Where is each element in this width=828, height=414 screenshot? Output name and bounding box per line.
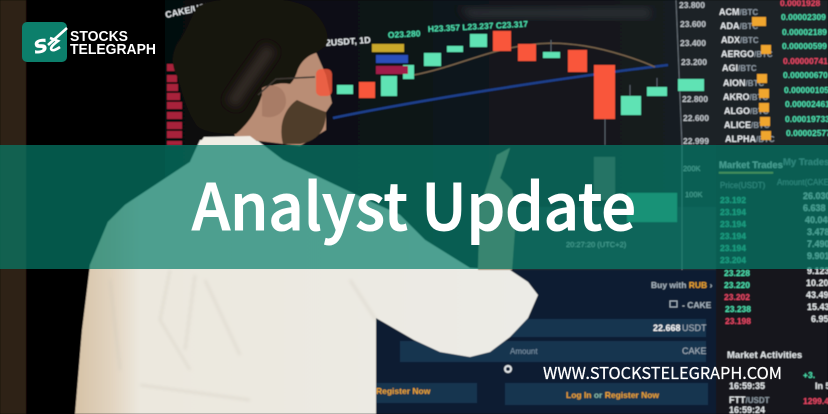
market price list: 0.00002189 <box>782 27 827 37</box>
market trades table: Price(USDT) <box>720 181 766 190</box>
market trades table: 23.194 <box>720 207 746 217</box>
shirt folds <box>110 270 376 400</box>
market trades table: 23.228 <box>724 268 750 278</box>
market price list: 0.00000599 <box>782 41 827 51</box>
market price list: 0.00000670 <box>783 70 828 80</box>
buy form text: Log In or Register Now <box>566 390 659 400</box>
logo <box>22 22 156 62</box>
screen glare <box>460 8 650 18</box>
market pair list: ALPHA/BTC <box>725 134 775 144</box>
chart lower details <box>566 157 703 249</box>
hair <box>173 0 328 134</box>
price axis labels <box>679 0 709 146</box>
price axis labels: 22.999 <box>683 136 709 146</box>
logo badge <box>22 22 67 62</box>
market pair list: ADX/BTC <box>721 35 759 45</box>
market price list: 0.00000105 <box>784 85 828 95</box>
wall strip <box>0 0 26 414</box>
logo wordmark <box>70 29 156 58</box>
market pair list: AERGO/BTC <box>721 49 773 59</box>
white collar <box>198 136 262 145</box>
title: Analyst Update <box>192 157 636 249</box>
candlestick chart <box>337 31 704 145</box>
form input rows <box>375 319 708 405</box>
beard <box>281 100 326 144</box>
market price list: 0.00000741 <box>783 56 828 66</box>
ear <box>262 85 286 117</box>
logo monogram: s <box>30 30 50 60</box>
price axis labels: 23.800 <box>679 0 705 10</box>
buy form text: CAKE <box>682 346 707 356</box>
buy and sell form panel <box>330 270 716 414</box>
market activities: +3. <box>803 370 815 380</box>
chart header text: H23.357 L23.237 C23.317 <box>428 19 528 34</box>
market trades table: 23.192 <box>720 195 746 205</box>
hand pointing at screen <box>478 148 516 270</box>
neck and face <box>232 48 332 146</box>
logo wordmark: STOCKS <box>70 29 128 45</box>
market pair list: AGI/BTC <box>722 63 757 73</box>
glasses <box>258 69 332 96</box>
chart header text: 2USDT, 1D <box>325 35 372 48</box>
market trades table: 23.194 <box>720 231 746 241</box>
green title band <box>0 145 828 269</box>
buy form text: - CAKE <box>682 300 712 310</box>
shirt <box>75 140 538 414</box>
market pair list: ADA/BTC <box>720 21 758 31</box>
buy form text: USDT <box>682 323 707 333</box>
market trades table: 23.220 <box>724 280 750 290</box>
lower chart panel <box>511 207 716 270</box>
analyst figure <box>75 0 538 414</box>
price axis labels: 23.600 <box>680 19 706 29</box>
buy form text: Amount <box>510 347 538 356</box>
price axis labels: 22.600 <box>683 113 709 123</box>
chart header text: O23.280 <box>388 28 421 40</box>
axis line <box>676 0 682 270</box>
market price list <box>780 0 828 138</box>
buy form text: Buy with RUB › <box>651 280 713 290</box>
market activities: 16:59:35 <box>729 381 765 391</box>
price axis labels: 22.800 <box>682 94 708 104</box>
market trades table: Market Trades <box>719 160 783 171</box>
market trades table: 23.202 <box>724 292 750 302</box>
moving average lines <box>333 43 668 118</box>
buy form text: 22.668 <box>653 323 681 333</box>
order book column bottom <box>716 145 828 414</box>
market pair list: AKRO/BTC <box>723 92 768 102</box>
buy form text <box>376 280 713 400</box>
market pair list: AION/BTC <box>723 78 764 88</box>
market trades table: 23.238 <box>725 304 751 314</box>
market pair list: ALICE/BTC <box>724 120 770 130</box>
market pair list <box>719 7 775 144</box>
chart header text <box>164 0 528 74</box>
chart lower details: 20:27:20 (UTC+2) <box>566 240 627 249</box>
market pair list: ALGO/BTC <box>724 106 769 116</box>
market activities <box>727 350 828 414</box>
market activities: Market Activities <box>727 350 802 361</box>
logo wordmark: TELEGRAPH <box>70 42 156 58</box>
market trades table: 23.194 <box>720 219 746 229</box>
order book column top <box>680 0 828 145</box>
market activities: FTT/USDT <box>729 395 770 405</box>
price axis labels: 23.200 <box>681 57 707 67</box>
market trades table: 23.198 <box>725 316 751 326</box>
buy form text: Register Now <box>376 386 431 396</box>
market trades table: 23.194 <box>720 243 746 253</box>
red price ladder <box>167 64 182 145</box>
market trades table: 6.638 <box>803 203 826 213</box>
price axis labels: 23.400 <box>680 38 706 48</box>
market pair list: ACM/BTC <box>719 7 758 17</box>
chart lower details: 100K <box>685 190 703 199</box>
hair highlight <box>232 48 270 104</box>
website url: WWW.STOCKSTELEGRAPH.COM <box>543 360 782 384</box>
chart lower details: 200K <box>683 164 701 173</box>
market trades table: 23.204 <box>720 255 746 265</box>
market price list: 0.00002309 <box>781 12 826 22</box>
market trades table <box>719 157 828 326</box>
